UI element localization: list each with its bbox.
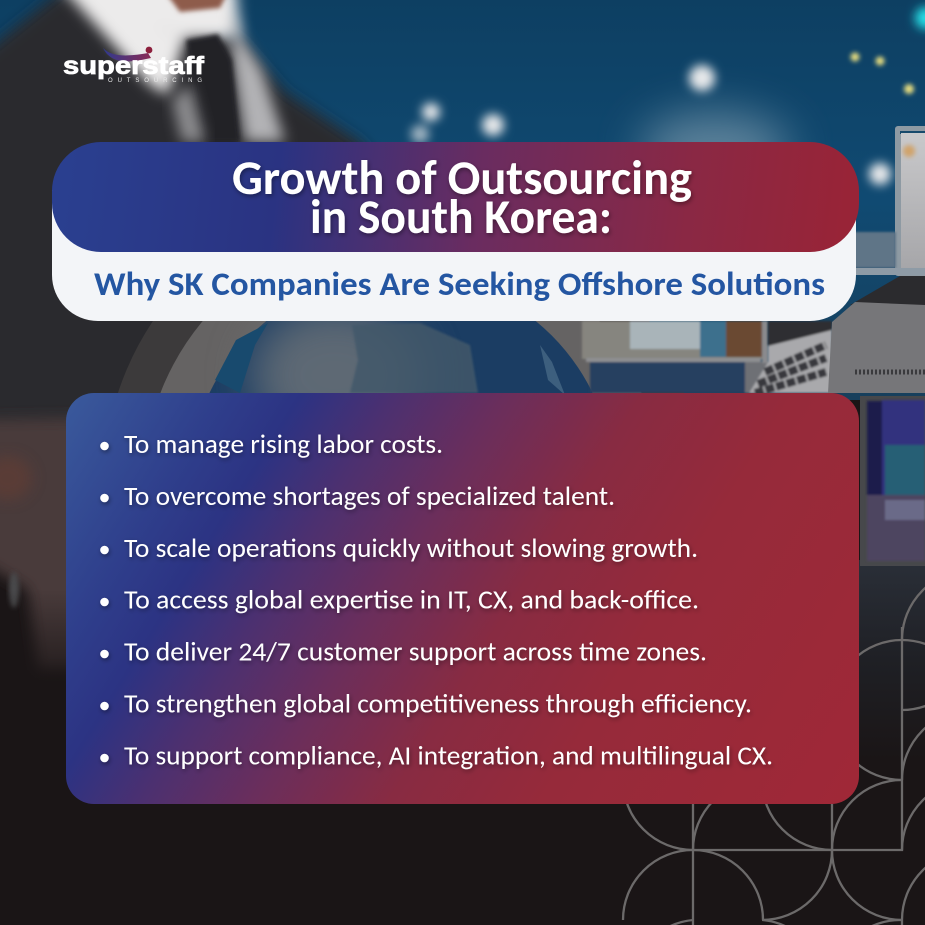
panel background [66, 393, 859, 804]
title: Growth of Outsourcing [232, 149, 692, 208]
subtitle card [52, 190, 856, 321]
reasons panel [66, 393, 859, 804]
notebook [828, 302, 925, 393]
bullet list: To scale operations quickly without slowing growth. [124, 532, 698, 565]
bullet list: To support compliance, AI integration, and multilingual CX. [124, 740, 773, 772]
neck [165, 0, 228, 12]
yellow lights [850, 52, 914, 94]
city photo [860, 396, 925, 566]
logo tagline: OUTSOURCING [108, 78, 202, 84]
hand [0, 418, 90, 670]
window strip [850, 232, 896, 268]
bullet list: To access global expertise in IT, CX, and back-office. [124, 584, 699, 616]
continents [350, 323, 478, 393]
header panel [52, 142, 859, 321]
bokeh lights [411, 65, 891, 185]
bullet list: To strengthen global competitiveness through efficiency. [124, 688, 752, 720]
title [232, 149, 692, 247]
photo tiles [582, 321, 770, 393]
geometric line pattern [623, 570, 925, 925]
bullet list: To manage rising labor costs. [124, 428, 443, 461]
bullet list [100, 428, 773, 772]
shirt collar [52, 0, 240, 95]
logo dot [146, 47, 152, 53]
suit [0, 0, 400, 440]
cyan light [915, 7, 925, 29]
logo [63, 47, 205, 84]
globe halo [103, 188, 699, 784]
bullet list: To overcome shortages of specialized talent. [124, 480, 615, 513]
globe [188, 273, 614, 699]
laptop screen [895, 126, 925, 276]
lower-left fade [0, 590, 70, 700]
background glow [640, 112, 790, 188]
tie [186, 34, 240, 142]
title pill [52, 142, 859, 252]
bullet list: To deliver 24/7 customer support across time zones. [124, 636, 707, 668]
logo wordmark: superstaff [63, 52, 205, 80]
subtitle: Why SK Companies Are Seeking Offshore Solutions [94, 263, 825, 304]
title: in South Korea: [310, 188, 612, 247]
right background below city photo [859, 560, 925, 760]
logo swoosh [103, 48, 151, 61]
laptop [749, 321, 832, 393]
